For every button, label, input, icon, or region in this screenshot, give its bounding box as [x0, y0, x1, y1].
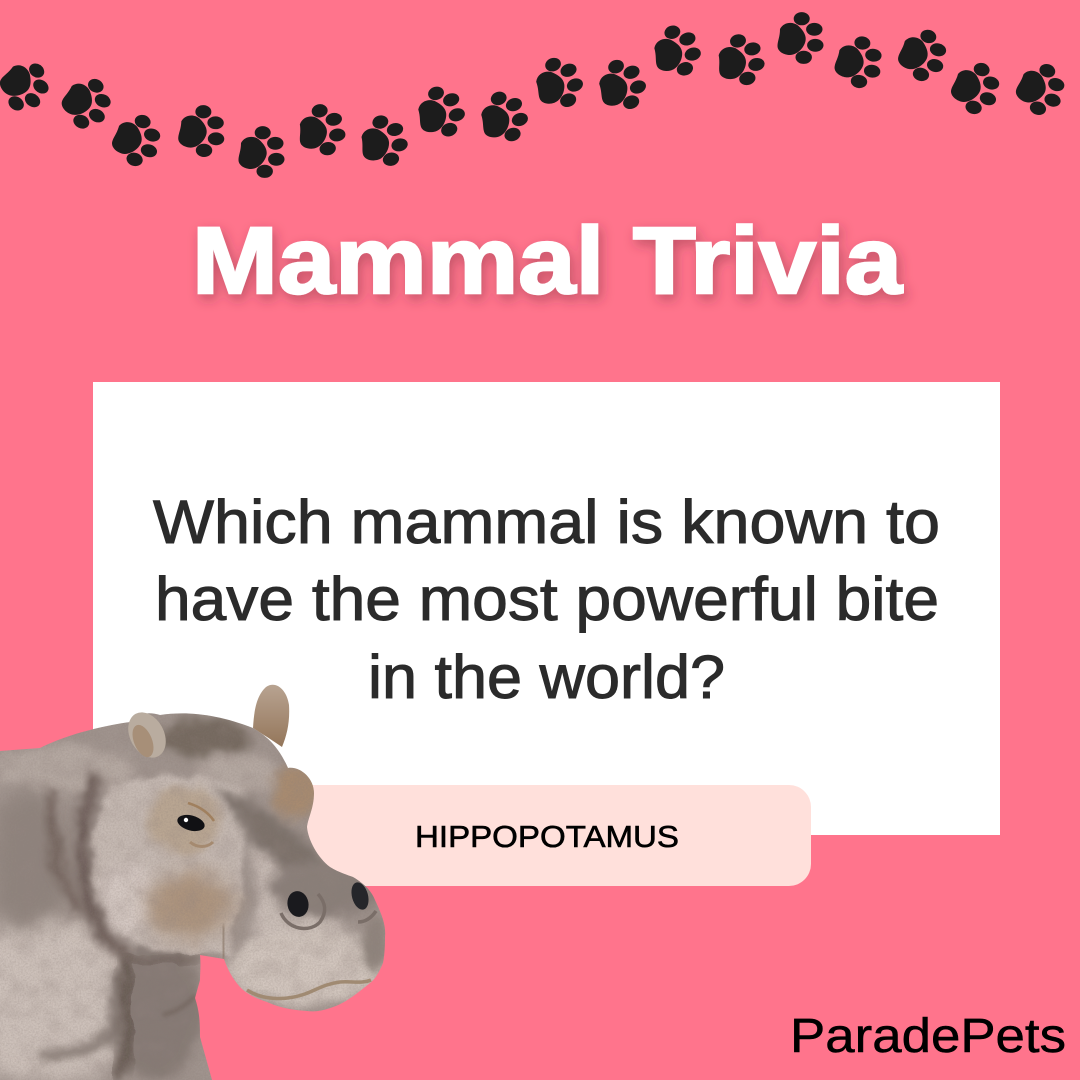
question text	[153, 488, 940, 711]
illustration: hippopotamus	[0, 670, 410, 1080]
answer box	[280, 785, 811, 886]
title: Mammal Trivia	[192, 208, 903, 314]
paw print trail	[0, 12, 1070, 178]
icon: front ear	[121, 706, 173, 764]
panel: question card	[93, 382, 1000, 835]
answer text: HIPPOPOTAMUS	[415, 819, 679, 854]
icon: mouth	[247, 980, 371, 999]
question text: in the world?	[368, 643, 725, 711]
question text: have the most powerful bite	[155, 565, 939, 633]
question text: Which mammal is known to	[153, 488, 940, 556]
brand name: ParadePets	[790, 1010, 1066, 1063]
icon: nostrils	[281, 880, 376, 928]
icon: back ear	[253, 685, 289, 747]
icon: eye	[176, 803, 214, 846]
